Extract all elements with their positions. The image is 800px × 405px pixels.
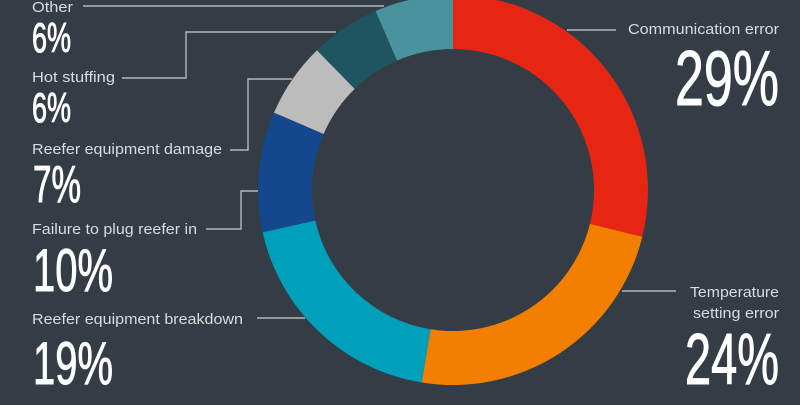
callout: temperature setting error (622, 285, 779, 400)
callout: communication error (567, 22, 779, 122)
segment: reefer equipment damage (274, 50, 355, 134)
segment: temperature setting error (422, 224, 642, 385)
value: 6% (32, 84, 71, 131)
callout: reefer equipment breakdown (32, 312, 305, 397)
value: 7% (33, 156, 81, 214)
callout: reefer equipment damage (32, 79, 292, 214)
value: 6% (32, 14, 71, 61)
connector (122, 32, 336, 78)
segment: hot stuffing (317, 11, 397, 89)
label: Failure to plug reefer in (32, 222, 197, 238)
label line 2: setting error (693, 306, 779, 322)
segment: other (376, 0, 453, 61)
connector (622, 290, 676, 292)
callout: hot stuffing (32, 32, 336, 131)
donut chart (258, 0, 648, 385)
segment: communication error (453, 0, 648, 237)
connector (567, 29, 616, 31)
value: 10% (33, 237, 113, 304)
connector (257, 317, 305, 319)
label: Other (32, 0, 73, 16)
label: Communication error (628, 22, 779, 38)
connector (83, 5, 384, 7)
callout: other (32, 0, 384, 61)
label: Reefer equipment breakdown (32, 312, 243, 328)
callout: failure to plug reefer in (32, 191, 258, 304)
label: Temperature (690, 285, 779, 301)
label: Reefer equipment damage (32, 142, 222, 158)
label: Hot stuffing (32, 70, 115, 86)
connector (206, 191, 258, 229)
connector (230, 79, 292, 150)
value: 19% (33, 330, 113, 397)
segment: failure to plug reefer in (258, 113, 324, 232)
segment: reefer equipment breakdown (263, 220, 430, 382)
